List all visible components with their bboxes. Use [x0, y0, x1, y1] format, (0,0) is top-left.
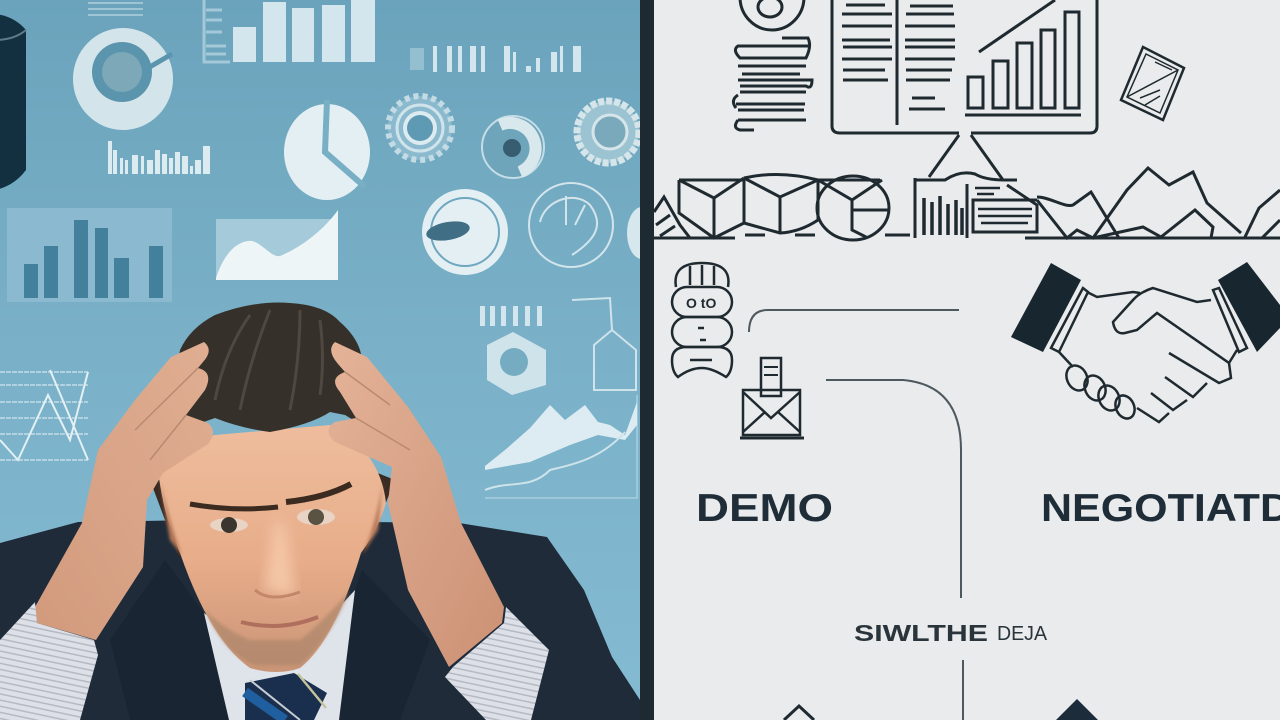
trend arrow — [979, 0, 1055, 52]
right eye — [297, 509, 335, 525]
page rule — [896, 0, 898, 125]
panel: overwhelmed analyst — [0, 0, 657, 720]
monitor with charts — [832, 0, 1097, 180]
left hand and forearm — [35, 342, 213, 640]
document column right — [905, 6, 955, 109]
bar chart: top — [88, 0, 375, 62]
icon: stacked server pods — [672, 263, 732, 377]
line chart: lower left — [0, 370, 88, 460]
lapel shading — [110, 560, 430, 720]
illustration: stressed man — [0, 302, 640, 720]
label: demo: DEMO — [696, 487, 833, 530]
icon: envelope with phone — [740, 358, 804, 438]
icon: pie chart — [284, 100, 370, 200]
area chart: lower right — [485, 395, 637, 498]
bar strip: small histogram — [108, 141, 210, 174]
left shirt cuff — [0, 602, 98, 720]
label: simulate the deal: SIWLTHE — [854, 620, 988, 646]
bar strip: upper right — [410, 46, 581, 72]
hair streaks — [215, 310, 322, 410]
suit jacket — [0, 520, 640, 720]
line-art band: cubes, documents, peaks — [654, 168, 1280, 240]
panel: sales process sketch — [654, 0, 1280, 720]
temple shadow — [160, 480, 383, 555]
divider — [640, 0, 654, 720]
label: simulate the deal — [854, 620, 1048, 646]
label: pod text: O tO — [686, 295, 716, 311]
icon: donut chart top — [73, 28, 173, 130]
icon group: right column — [480, 298, 636, 395]
label: negotiation: NEGOTIATD — [1041, 487, 1280, 530]
connector: top — [749, 310, 959, 332]
monitor frame — [832, 0, 1097, 133]
mouth — [241, 617, 318, 626]
tie stripes — [245, 674, 326, 720]
monitor stand — [929, 135, 1003, 180]
finger lines — [135, 368, 410, 460]
bar chart: mid left — [7, 208, 172, 302]
left eyebrow — [190, 504, 278, 509]
icon: bottom solid marker — [1056, 699, 1098, 720]
icon: outlined dial — [529, 183, 613, 267]
right hand and forearm — [328, 342, 504, 667]
document column left — [842, 5, 892, 80]
icon: tilted tablet — [1121, 47, 1184, 120]
icon: top circle badge — [740, 0, 804, 30]
ear shadow — [150, 470, 395, 560]
right shirt cuff — [445, 607, 549, 720]
icon: stacked books — [733, 38, 812, 130]
hair — [163, 302, 382, 437]
icon: large dial white — [422, 189, 508, 275]
necktie — [245, 673, 327, 720]
icon: bottom outline marker — [784, 706, 814, 720]
icon: handshake — [1011, 262, 1280, 422]
icon: edge dial — [627, 207, 657, 259]
mini bar chart — [965, 12, 1081, 115]
icon: gear ring — [388, 96, 452, 160]
nose — [255, 590, 300, 597]
face — [159, 425, 386, 672]
right eyebrow — [286, 484, 351, 502]
icon: textured wheel — [577, 101, 639, 163]
label: simulate the deal: DEJA — [997, 623, 1048, 645]
shirt front — [204, 590, 355, 720]
icon: database cylinder — [0, 14, 26, 190]
stubble — [205, 590, 350, 665]
icon: small dial — [482, 116, 544, 178]
connector: long curved — [826, 380, 963, 720]
area chart: white mountain — [216, 210, 338, 280]
nose highlight and shadow — [265, 520, 295, 595]
left eye — [210, 518, 248, 532]
